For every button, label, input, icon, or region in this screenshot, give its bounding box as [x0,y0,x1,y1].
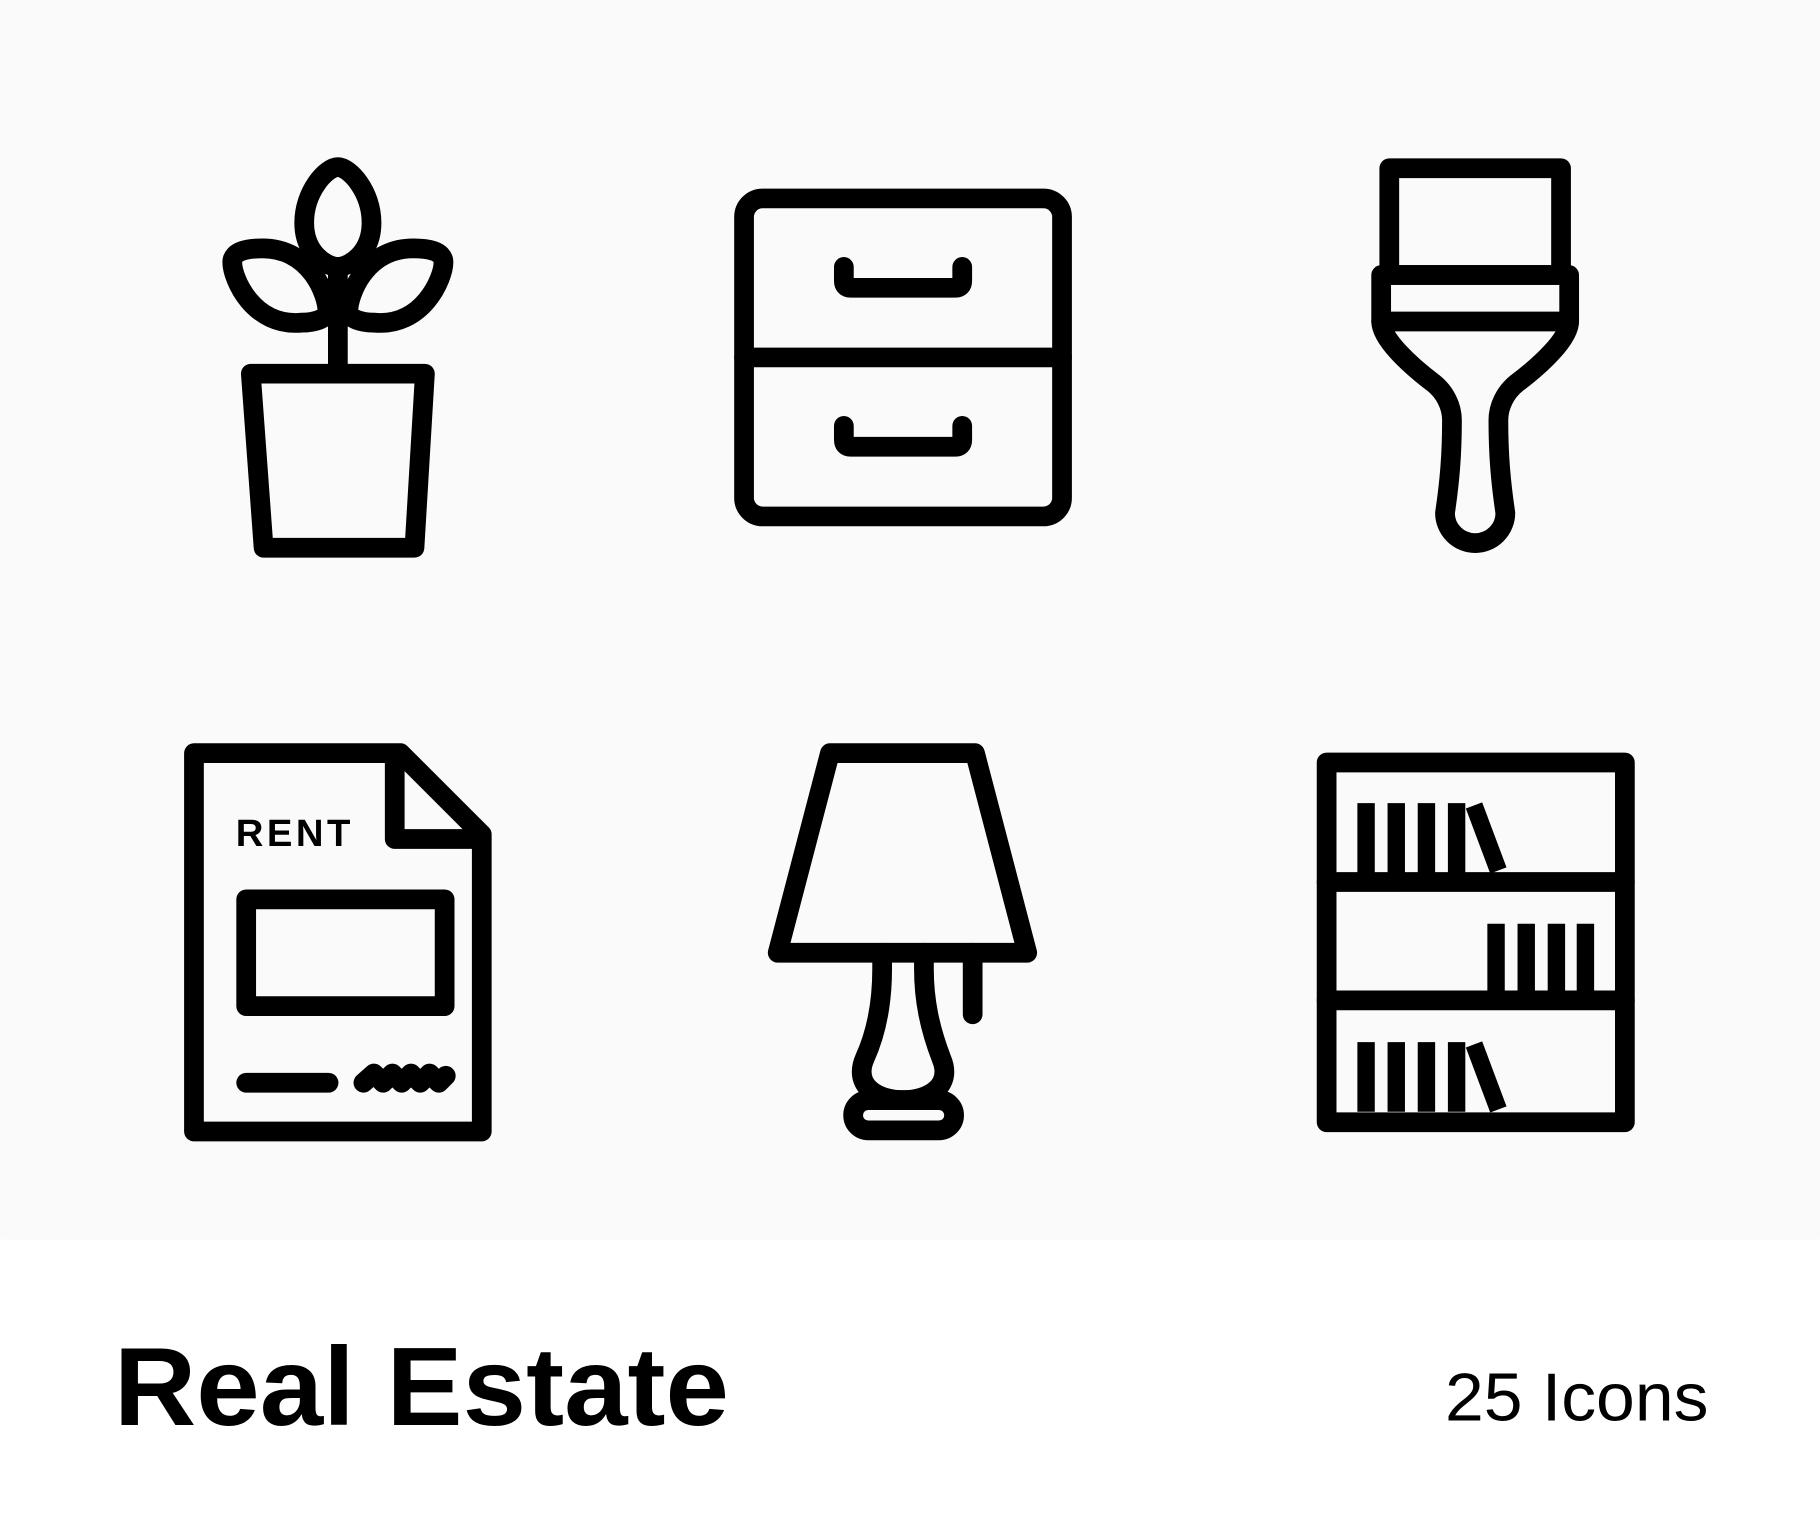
icon: bookshelf [1327,762,1625,1122]
icon: table lamp [778,753,1027,1130]
subtitle: icon count: 25 Icons [1445,1360,1708,1435]
icon: rent document [194,753,482,1131]
label: RENT: RENT [236,812,354,855]
icon: potted plant [232,167,443,548]
icon: paint brush [1381,168,1569,543]
title: Real Estate [114,1324,729,1449]
icon: drawer cabinet [744,198,1062,516]
